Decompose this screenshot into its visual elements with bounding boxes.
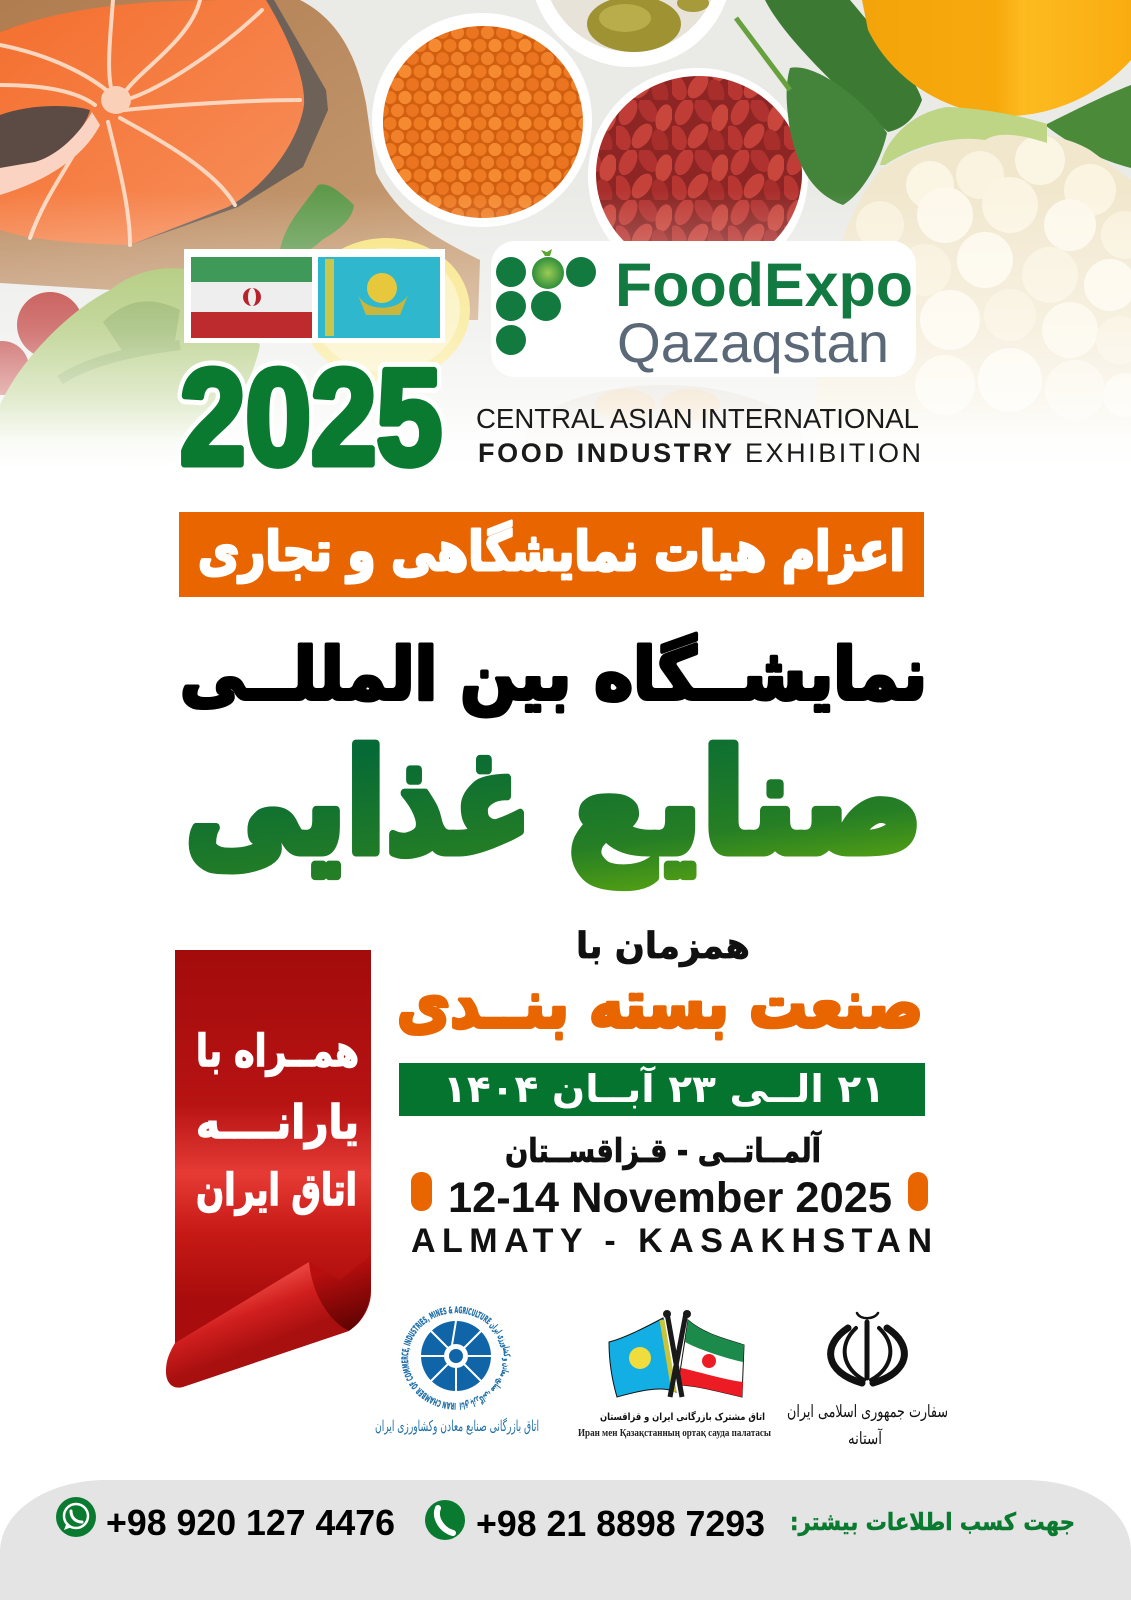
logo: Iran embassy emblem — [787, 1313, 948, 1449]
exhibition tagline: CENTRAL ASIAN INTERNATIONAL — [476, 403, 919, 434]
exhibition tagline: FOOD INDUSTRY — [478, 438, 732, 468]
salmon fat lines — [0, 0, 300, 245]
chamber star — [421, 1321, 491, 1391]
wooden board — [0, 0, 480, 320]
ribbon curl — [166, 1262, 349, 1388]
FoodExpo logo — [491, 241, 916, 377]
exhibition tagline: EXHIBITION — [745, 438, 921, 468]
date bar persian: ۲۱ الــی ۲۳ آبــان ۱۴۰۴ — [443, 1065, 885, 1111]
lentil bowl — [372, 13, 592, 227]
main title black: نمایشــگاه بین المللــی — [180, 632, 927, 717]
white fade — [0, 190, 1131, 470]
pale bowl under tagline — [560, 385, 768, 406]
logo: Iran chamber of commerce: اتاق بازرگانی صنایع معادن وکشاورزی ایران — [375, 1417, 539, 1435]
logo dots — [496, 249, 596, 355]
icon: phone — [425, 1500, 465, 1540]
yellow pepper — [862, 0, 1131, 116]
more info label: جهت کسب اطلاعات بیشتر: — [790, 1508, 1075, 1536]
lemon — [302, 238, 470, 382]
spinach leaves — [765, 0, 922, 132]
lettuce — [0, 268, 260, 440]
FoodExpo logo: Qazaqstan — [617, 311, 889, 374]
orange banner — [179, 512, 924, 597]
red ribbon: همــراه با — [196, 1026, 359, 1077]
whatsapp number: +98 920 127 4476 — [106, 1502, 395, 1543]
crossed flag Iran — [678, 1320, 744, 1397]
red ribbon — [166, 950, 371, 1388]
main title green: صنایع — [568, 721, 923, 887]
phone number: +98 21 8898 7293 — [476, 1503, 765, 1544]
red ribbon: یارانــــه — [196, 1095, 359, 1149]
logo: Iran Kazakhstan joint chamber: اتاق مشترک بازرگانی ایران و قزاقستان — [600, 1410, 765, 1423]
logo: Iran Kazakhstan joint chamber — [578, 1310, 771, 1439]
year 2025 outline: 2025 — [180, 341, 442, 493]
cauliflower leaf — [880, 107, 1047, 165]
icon: whatsapp — [56, 1497, 96, 1537]
salmon steak — [0, 0, 328, 245]
english date with pills: 12-14 November 2025 — [448, 1174, 892, 1222]
flag: Iran — [191, 257, 312, 338]
year 2025: 2025 — [180, 341, 442, 493]
logo: Iran Kazakhstan joint chamber: Иран мен Қазақстанның ортақ сауда палатасы — [578, 1428, 771, 1439]
packaging industry heading: صنعت بسته بنــدی — [397, 966, 923, 1043]
goji bowl — [588, 68, 808, 241]
flag: Kazakhstan — [318, 257, 440, 338]
tomatoes — [17, 292, 80, 354]
exhibition tagline — [476, 403, 921, 468]
olive bowl — [530, 0, 732, 67]
logo: Iran embassy emblem: سفارت جمهوری اسلامی ایران — [787, 1402, 948, 1422]
hero food photo — [0, 0, 1131, 442]
FoodExpo logo: FoodExpo — [615, 251, 913, 319]
cauliflower — [816, 134, 1131, 398]
chamber ring text: IRAN CHAMBER OF COMMERCE, INDUSTRIES, MINES & AGRICULTURE اتاق بازرگانی، صنایع، معادن و کشاورزی ایران — [401, 1306, 511, 1410]
simultaneous with: همزمان با — [576, 926, 750, 967]
main title green — [185, 721, 923, 887]
ribbon curl back — [309, 1255, 371, 1331]
location persian: آلمــاتــی - قـزاقســتان — [505, 1130, 822, 1171]
flags panel — [184, 249, 445, 343]
english location: ALMATY - KASAKHSTAN — [411, 1222, 932, 1260]
logo: Iran chamber of commerce — [375, 1306, 539, 1435]
date bar persian — [399, 1063, 925, 1116]
footer contact band — [0, 1480, 1131, 1600]
orange banner: اعزام هیات نمایشگاهی و تجاری — [198, 520, 905, 583]
herb leaf — [280, 184, 354, 249]
crossed flag Kazakhstan — [609, 1318, 676, 1397]
main title green: غذایی — [185, 721, 532, 886]
red ribbon: اتاق ایران — [196, 1165, 357, 1216]
logo: Iran embassy emblem: آستانه — [848, 1427, 883, 1449]
